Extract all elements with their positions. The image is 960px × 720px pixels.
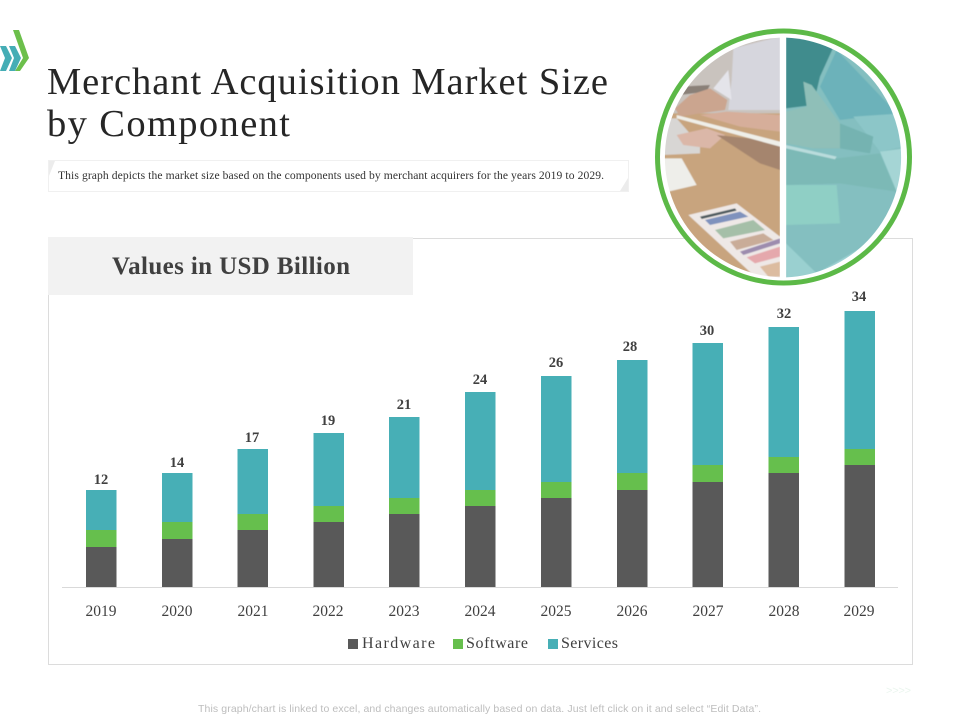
total labels: 26 <box>549 355 563 371</box>
description box <box>48 160 628 192</box>
year labels: 2022 <box>312 603 344 620</box>
description box: This graph depicts the market size based on the components used by merchant acquirers for the years 2019 to 2029. <box>58 169 604 182</box>
total labels: 14 <box>170 455 184 471</box>
series: hardware <box>86 465 875 587</box>
year labels: 2021 <box>238 603 268 620</box>
chart heading: values in USD billion <box>48 237 413 295</box>
year labels: 2026 <box>616 603 648 620</box>
total labels: 24 <box>473 372 487 388</box>
series: services <box>86 311 875 530</box>
photo: right half teal <box>786 38 902 278</box>
chart panel <box>48 238 912 664</box>
title: by Component <box>47 103 290 145</box>
year labels: 2023 <box>388 603 420 620</box>
total labels: 12 <box>94 472 108 488</box>
faint chevrons: >>>> <box>886 685 911 697</box>
title <box>47 61 608 145</box>
total labels: 17 <box>245 430 259 446</box>
series: software <box>86 449 875 547</box>
legend: Software <box>466 635 528 652</box>
year labels: 2028 <box>768 603 800 620</box>
legend: Hardware <box>362 635 435 652</box>
photo in circle <box>657 31 910 283</box>
year labels: 2029 <box>844 603 875 620</box>
total labels: 28 <box>623 339 637 355</box>
footnote: This graph/chart is linked to excel, and changes automatically based on data. Just left click on it and select “Edit Data”. <box>198 703 761 715</box>
year labels <box>86 603 875 620</box>
total labels: 32 <box>777 306 791 322</box>
year labels: 2025 <box>540 603 572 620</box>
title: Merchant Acquisition Market Size <box>47 61 608 103</box>
photo: left half <box>664 38 780 278</box>
year labels: 2020 <box>162 603 193 620</box>
chart heading: values in USD billion: Values in USD Billion <box>112 253 350 280</box>
total labels <box>94 289 866 488</box>
total labels: 34 <box>852 289 866 305</box>
legend: Services <box>561 635 618 652</box>
total labels: 21 <box>397 397 411 413</box>
bar chart <box>62 289 898 620</box>
total labels: 19 <box>321 413 335 429</box>
year labels: 2027 <box>692 603 724 620</box>
legend <box>348 635 618 652</box>
year labels: 2024 <box>464 603 496 620</box>
axis line <box>62 586 898 588</box>
year labels: 2019 <box>86 603 117 620</box>
icon: corner chevrons <box>0 30 29 71</box>
total labels: 30 <box>700 323 714 339</box>
